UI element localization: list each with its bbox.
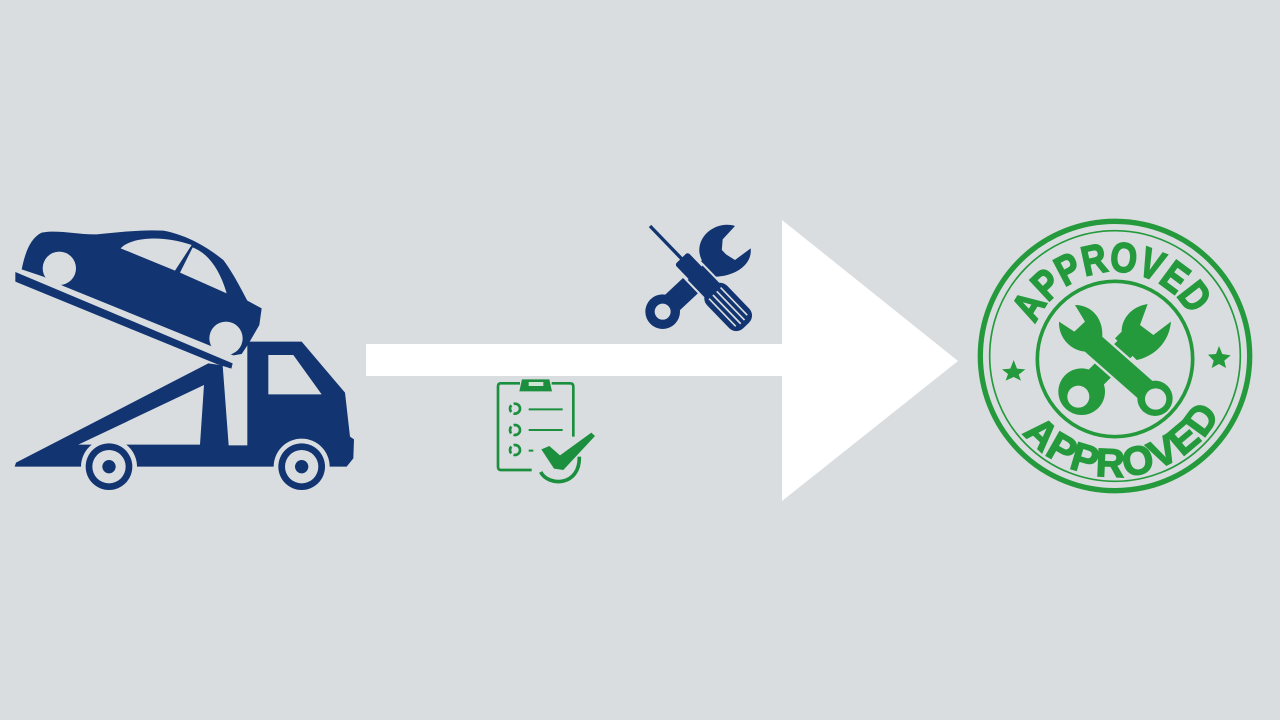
icon: screwdriver and wrench: [640, 216, 756, 335]
front wheel arch: [209, 322, 243, 355]
wrench back: lower-left to upper-right: [1058, 304, 1171, 415]
checklist rows: [510, 404, 563, 455]
icon: green checklist clipboard: [498, 379, 595, 482]
car body: [22, 230, 262, 355]
check swoosh: [541, 457, 579, 482]
clipboard outline: [498, 383, 573, 470]
front wheel: [274, 439, 330, 495]
wrench: [645, 225, 751, 329]
top APPROVED text: APPROVED: [1014, 242, 1209, 324]
rear wheel: [81, 439, 137, 495]
inner ring: [1037, 281, 1193, 437]
icon: tow truck with car on ramp: [15, 230, 354, 495]
tilted ramp: [15, 272, 233, 369]
left star: [1002, 360, 1025, 381]
right star: [1208, 346, 1231, 368]
check mark: [541, 433, 595, 470]
wrench front: upper-left to lower-right: [1059, 305, 1173, 416]
screwdriver: [640, 216, 756, 335]
truck body and lift: [15, 342, 354, 467]
rear wheel arch: [43, 252, 76, 285]
stamp: approved seal: [978, 218, 1252, 494]
arrow: white process arrow: [366, 220, 958, 501]
bottom APPROVED text: APPROVED: [1021, 405, 1216, 478]
clipboard clip: [519, 379, 552, 391]
outer rings: [980, 221, 1250, 491]
